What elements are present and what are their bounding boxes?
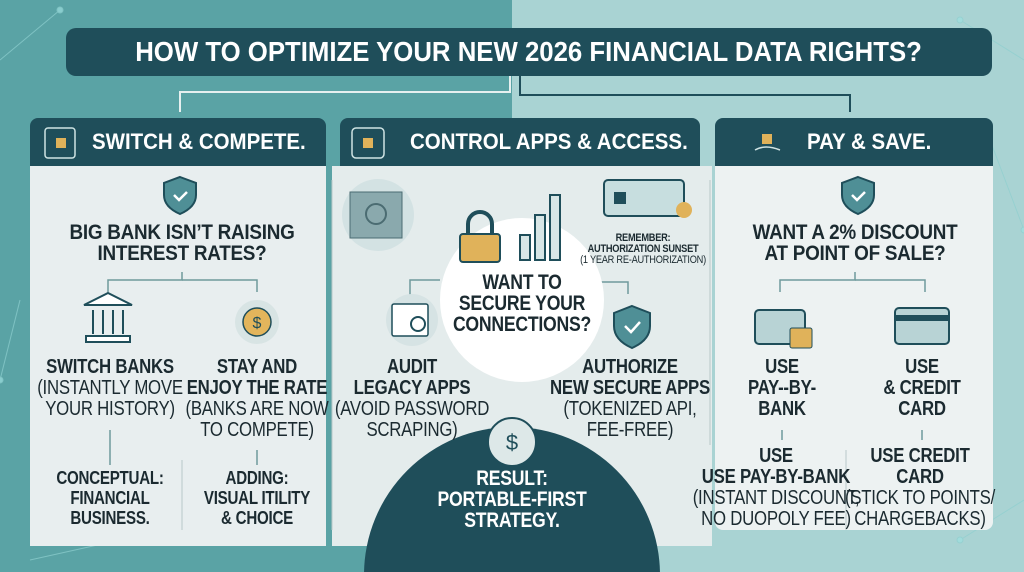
text layer: BANK — [758, 398, 806, 420]
text layer: USE — [759, 445, 793, 467]
text layer: FINANCIAL — [70, 488, 150, 508]
panel: control apps — [332, 118, 712, 546]
text layer: SECURE YOUR — [459, 292, 585, 315]
shields — [164, 177, 874, 348]
central white circle — [440, 218, 604, 382]
text layer: AUTHORIZATION SUNSET — [588, 243, 698, 255]
text layer: RESULT: — [476, 467, 548, 490]
panel header: PAY & SAVE. — [807, 129, 931, 154]
icons and shapes: $ — [506, 430, 518, 455]
text layer: CARD — [898, 398, 946, 420]
text layer: (BANKS ARE NOW — [185, 398, 329, 420]
bank icon — [84, 293, 132, 342]
text layer: VISUAL ITILITY — [204, 488, 310, 508]
text layer: NEW SECURE APPS — [550, 377, 710, 399]
text layer: & CHOICE — [221, 508, 293, 528]
panel: pay & save — [715, 118, 993, 530]
text layer: AUDIT — [387, 356, 437, 378]
panel: switch & compete — [30, 118, 326, 546]
text layer: PORTABLE-FIRST — [437, 488, 587, 511]
text layer: USE — [765, 356, 799, 378]
title — [66, 28, 992, 76]
chart — [520, 195, 560, 260]
text layer: SWITCH BANKS — [46, 356, 174, 378]
text layer: CONCEPTUAL: — [56, 468, 164, 488]
text layer: (INSTANT DISCOUNT, — [693, 487, 859, 509]
text layer: BUSINESS. — [70, 508, 150, 528]
header icons — [45, 128, 780, 158]
text layer: NO DUOPOLY FEE) — [701, 508, 851, 530]
audit icon — [386, 294, 438, 346]
text layer: INTEREST RATES? — [98, 242, 266, 265]
text layer: USE PAY-BY-BANK — [702, 466, 850, 488]
text layer: (TOKENIZED API, — [563, 398, 697, 420]
text layer: CHARGEBACKS) — [854, 508, 986, 530]
dividers — [182, 180, 846, 530]
icons and shapes: $ — [253, 315, 262, 332]
text layer: ADDING: — [226, 468, 288, 488]
text layer: FEE-FREE) — [587, 419, 673, 441]
text layer: CARD — [896, 466, 944, 488]
password card — [604, 180, 684, 216]
text layer: AT POINT OF SALE? — [765, 242, 945, 265]
text layer: PAY--BY- — [748, 377, 816, 399]
result circle — [364, 427, 660, 572]
text layer: STAY AND — [217, 356, 297, 378]
panel header — [715, 118, 993, 166]
title: HOW TO OPTIMIZE YOUR NEW 2026 FINANCIAL DATA RIGHTS? — [136, 36, 922, 67]
text layer: USE CREDIT — [870, 445, 970, 467]
text layer: YOUR HISTORY) — [45, 398, 175, 420]
cards — [755, 310, 805, 344]
lock — [468, 212, 492, 236]
text layer: BIG BANK ISN’T RAISING — [69, 221, 295, 244]
text layer: (AVOID PASSWORD — [335, 398, 489, 420]
text layer: TO COMPETE) — [200, 419, 314, 441]
text layer: & CREDIT — [883, 377, 961, 399]
text layer: STRATEGY. — [464, 509, 560, 532]
connectors — [180, 76, 510, 112]
panel header: CONTROL APPS & ACCESS. — [410, 129, 688, 154]
panel header: SWITCH & COMPETE. — [92, 129, 306, 154]
text layer: (1 YEAR RE-AUTHORIZATION) — [580, 254, 706, 266]
vault icon — [342, 179, 414, 251]
text layer: AUTHORIZE — [582, 356, 678, 378]
text layer: WANT A 2% DISCOUNT — [753, 221, 957, 244]
text layer: (INSTANTLY MOVE — [37, 377, 183, 399]
text layer: USE — [905, 356, 939, 378]
text layer: CONNECTIONS? — [453, 313, 591, 336]
text layer: (STICK TO POINTS/ — [845, 487, 995, 509]
panel header — [30, 118, 326, 166]
panel header — [340, 118, 700, 166]
text layer: WANT TO — [482, 271, 562, 294]
text layer: REMEMBER: — [616, 232, 670, 244]
text layer: SCRAPING) — [366, 419, 458, 441]
text layer: ENJOY THE RATE — [187, 377, 327, 399]
coin icon — [235, 300, 279, 344]
text layer: LEGACY APPS — [354, 377, 470, 399]
branch arrows — [108, 272, 925, 465]
